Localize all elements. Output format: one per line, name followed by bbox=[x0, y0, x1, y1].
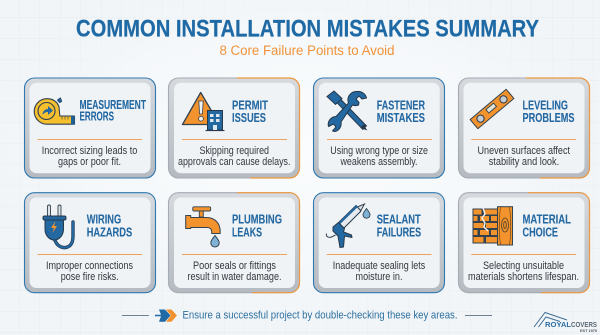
description: Poor seals or fittings bbox=[193, 260, 276, 272]
heading: MISTAKES bbox=[377, 111, 425, 125]
heading bbox=[232, 98, 268, 125]
heading bbox=[377, 98, 425, 125]
panel: leveling problems bbox=[458, 78, 590, 178]
description bbox=[46, 260, 133, 283]
heading: MEASUREMENT bbox=[80, 98, 146, 112]
heading bbox=[87, 213, 132, 240]
heading bbox=[232, 213, 282, 240]
panel: wiring hazards bbox=[24, 193, 156, 293]
heading: ISSUES bbox=[232, 111, 266, 125]
description: Incorrect sizing leads to bbox=[42, 145, 137, 157]
description: approvals can cause delays. bbox=[178, 156, 290, 168]
heading: FASTENER bbox=[377, 98, 425, 112]
icon: tape measure bbox=[34, 98, 75, 124]
icon: warning sign with building bbox=[182, 92, 224, 131]
description: Using wrong type or size bbox=[330, 145, 428, 157]
heading: PERMIT bbox=[232, 98, 268, 112]
icon: caulking gun bbox=[326, 204, 370, 248]
description: Inadequate sealing lets bbox=[333, 260, 425, 272]
logo: Royal Covers: ROYAL bbox=[545, 320, 571, 329]
description: result in water damage. bbox=[188, 271, 282, 283]
footer line right bbox=[465, 314, 492, 317]
logo: Royal Covers bbox=[534, 312, 597, 333]
description bbox=[478, 145, 570, 168]
heading: SEALANT bbox=[377, 213, 421, 227]
heading: WIRING bbox=[87, 213, 121, 227]
heading bbox=[522, 98, 574, 125]
description bbox=[188, 260, 282, 283]
description: weakens assembly. bbox=[340, 156, 418, 168]
description: Improper connections bbox=[46, 260, 133, 272]
description: stability and look. bbox=[489, 156, 559, 168]
heading: PROBLEMS bbox=[522, 111, 574, 125]
description: gaps or poor fit. bbox=[58, 156, 121, 168]
description: Selecting unsuitable bbox=[483, 260, 564, 272]
description bbox=[178, 145, 290, 168]
heading: PLUMBING bbox=[232, 213, 282, 227]
description: pose fire risks. bbox=[61, 271, 119, 283]
icon: cracked bricks and wood bbox=[472, 207, 512, 245]
description: Skipping required bbox=[200, 145, 269, 157]
description: moisture in. bbox=[356, 271, 402, 283]
heading: LEAKS bbox=[232, 226, 262, 240]
heading bbox=[522, 213, 571, 240]
description bbox=[330, 145, 428, 168]
heading bbox=[80, 98, 146, 124]
icon: electric plug bbox=[43, 205, 73, 248]
icon: dripping faucet bbox=[186, 207, 220, 247]
panel: permit issues bbox=[168, 78, 300, 178]
heading bbox=[377, 213, 421, 240]
heading: LEVELING bbox=[522, 98, 568, 112]
panel: fastener mistakes bbox=[314, 78, 444, 178]
panel: material choice bbox=[458, 193, 590, 293]
description bbox=[333, 260, 425, 283]
panel: measurement errors bbox=[24, 78, 156, 178]
heading: ERRORS bbox=[80, 110, 114, 124]
heading: FAILURES bbox=[377, 226, 421, 240]
icon: spirit level bbox=[470, 89, 514, 129]
heading: MATERIAL bbox=[522, 213, 571, 227]
subtitle: 8 Core Failure Points to Avoid bbox=[220, 43, 394, 59]
description: Uneven surfaces affect bbox=[478, 145, 570, 157]
heading: HAZARDS bbox=[87, 226, 132, 240]
icon: crossed screw and wrench bbox=[327, 91, 368, 132]
description bbox=[42, 145, 137, 168]
footer message: Ensure a successful project by double-checking these key areas. bbox=[182, 310, 458, 322]
description: materials shortens lifespan. bbox=[468, 271, 579, 283]
description bbox=[468, 260, 579, 283]
panel: sealant failures bbox=[314, 193, 444, 293]
panel: plumbing leaks bbox=[168, 193, 300, 293]
logo: Royal Covers: EST 1970 bbox=[580, 329, 597, 333]
heading: CHOICE bbox=[522, 226, 558, 240]
icon: double chevron arrow bbox=[155, 310, 177, 322]
footer line left bbox=[122, 314, 149, 317]
